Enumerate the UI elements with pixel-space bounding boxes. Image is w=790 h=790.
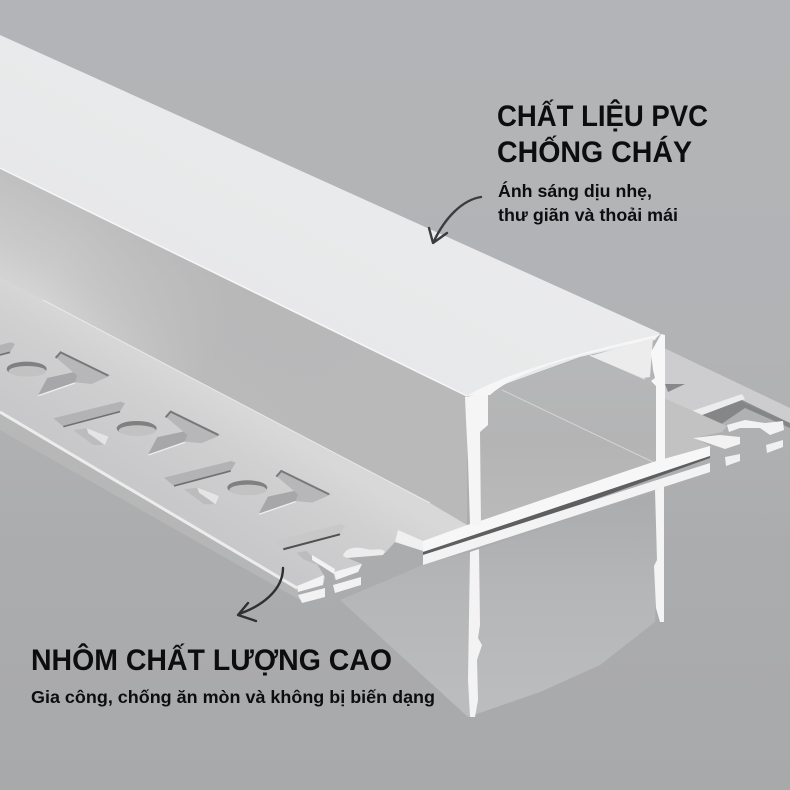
left post reflection	[468, 549, 482, 717]
piece front faces and tabs	[297, 555, 362, 603]
flange reflection	[423, 463, 710, 565]
strip edge highlight	[0, 412, 297, 588]
arrow pointing to aluminium	[238, 568, 283, 621]
heading: PVC material	[497, 99, 708, 169]
text: PVC description: thư giãn và thoải mái	[498, 205, 678, 225]
perforations	[0, 283, 345, 566]
text: PVC description	[498, 180, 678, 225]
heading: PVC material: CHỐNG CHÁY	[497, 135, 692, 169]
right aluminium strip	[664, 348, 790, 466]
cover inner return	[590, 338, 653, 378]
left post	[465, 393, 488, 525]
translucent PVC cover	[0, 35, 665, 525]
right post	[651, 334, 665, 462]
right post reflection	[654, 486, 664, 622]
bump piece	[343, 548, 385, 558]
right strip shadow	[697, 400, 790, 428]
aluminium strip reflection	[0, 412, 300, 600]
right tab shapes	[727, 420, 784, 435]
text: PVC description: Ánh sáng dịu nhẹ,	[498, 180, 652, 201]
cover front lip	[467, 334, 661, 396]
channel interior	[480, 355, 665, 521]
flange middle	[664, 398, 727, 462]
flange shadow	[423, 456, 710, 555]
arrow pointing to cover	[429, 197, 481, 243]
heading: aluminium: NHÔM CHẤT LƯỢNG CAO	[31, 643, 392, 677]
text: aluminium description: Gia công, chống ăn mòn và không bị biến dạng	[31, 687, 435, 707]
side wall of channel	[0, 168, 467, 526]
interior line	[502, 390, 653, 462]
cover edge line	[0, 168, 467, 396]
flange step front face	[395, 530, 423, 551]
heading: PVC material: CHẤT LIỆU PVC	[497, 99, 708, 133]
lower flange	[423, 446, 710, 565]
right strip light tab	[680, 394, 745, 417]
aluminium flange strip	[0, 277, 467, 603]
strip upper ridge	[43, 300, 430, 503]
interior back line	[590, 355, 645, 379]
channel reflection	[340, 486, 664, 717]
